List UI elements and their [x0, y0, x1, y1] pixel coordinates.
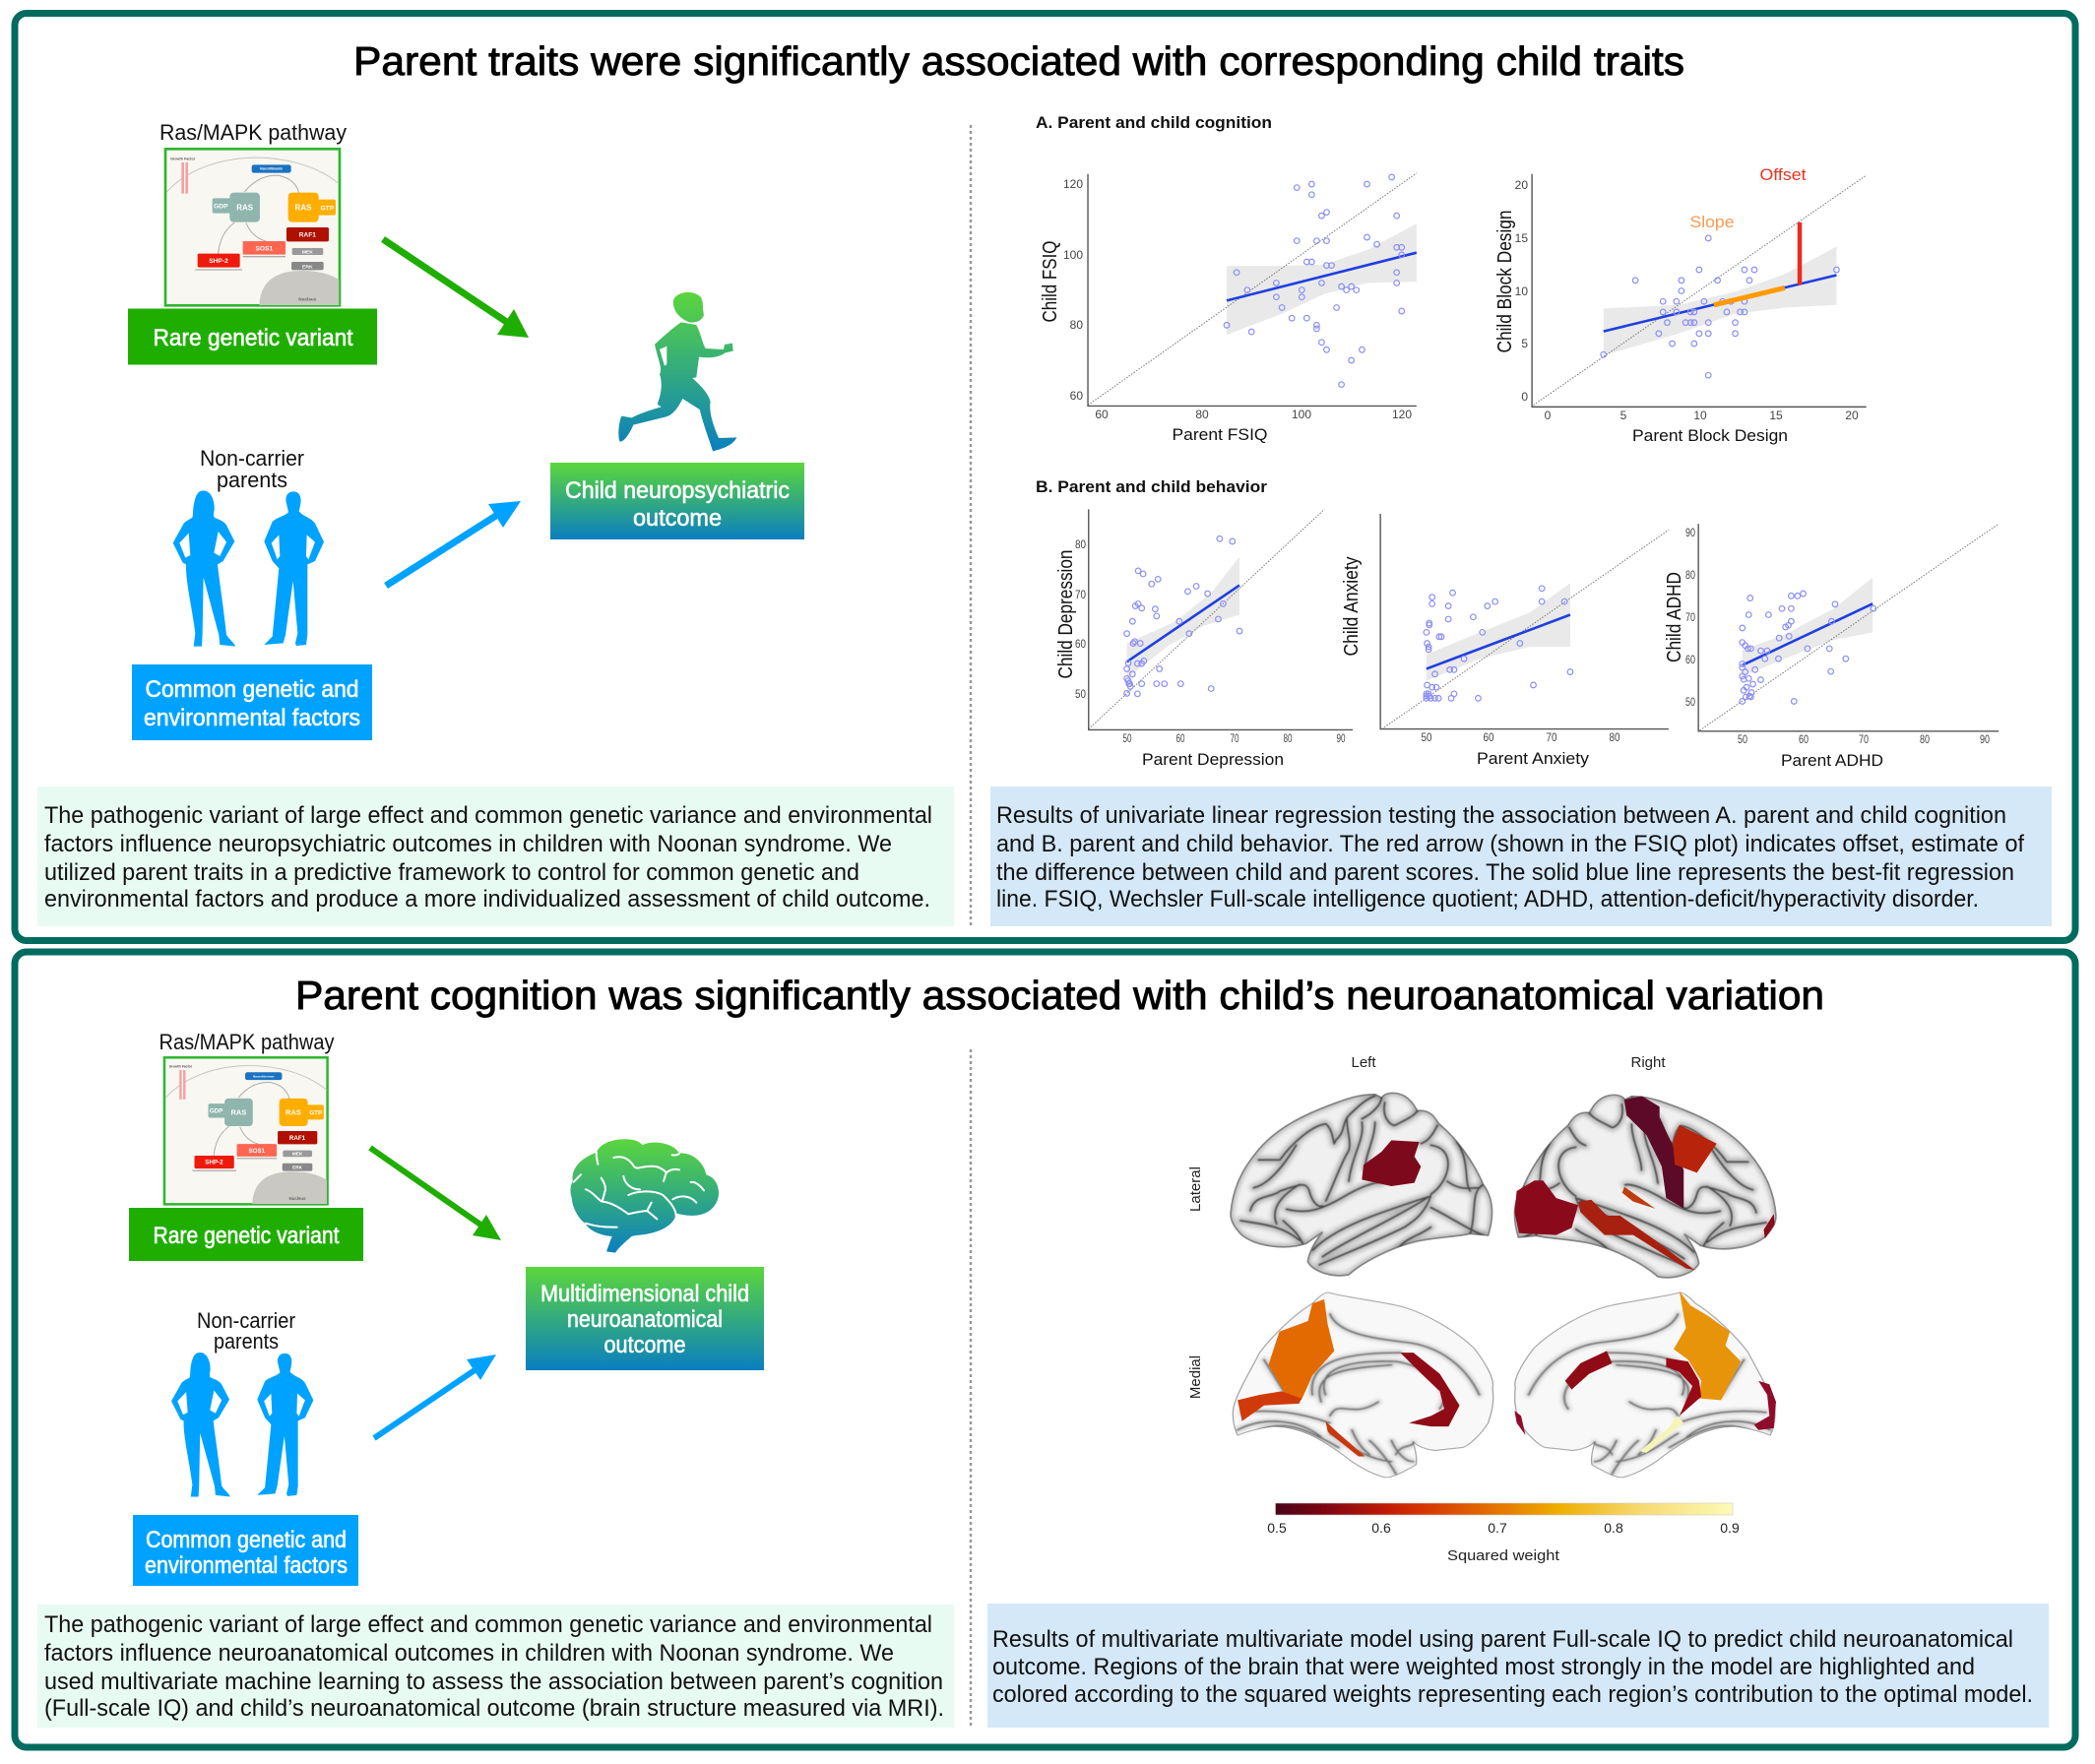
chart: child FSIQ vs parent FSIQ: Parent FSIQ	[1172, 425, 1268, 444]
brain: left medial	[1233, 1292, 1493, 1478]
chart: child vs parent depression: 60	[1175, 731, 1185, 745]
text block: right description	[987, 1604, 2049, 1728]
chart: child vs parent block design: 0	[1521, 390, 1528, 404]
text block: right description: colored according to the squared weights representing each region’s contribution to the optimal model.	[992, 1681, 2033, 1708]
diagram: Ras/MAPK pathway: RAS	[295, 204, 312, 213]
text block: left description	[37, 787, 954, 926]
icon: brain	[571, 1139, 719, 1253]
box: rare genetic variant: Rare genetic variant	[154, 1223, 340, 1249]
chart: child vs parent anxiety: 70	[1546, 730, 1557, 744]
text block: left description: factors influence neuroanatomical outcomes in children with Noonan syndrome. We	[44, 1640, 894, 1667]
diagram: Ras/MAPK pathway	[164, 1057, 328, 1204]
chart: child FSIQ vs parent FSIQ: Child FSIQ	[1040, 240, 1061, 323]
label: Ras/MAPK pathway: Ras/MAPK pathway	[159, 120, 347, 145]
text block: right description: Results of multivariate multivariate model using parent Full-scale IQ to predict child neuroanatomical	[992, 1626, 2013, 1653]
chart: child vs parent ADHD: 50	[1738, 732, 1747, 746]
text block: left description: factors influence neuropsychiatric outcomes in children with Noonan syndrome. We	[44, 831, 892, 857]
panel: parent cognition and neuroanatomical variation	[15, 952, 2075, 1747]
chart: child FSIQ vs parent FSIQ	[1040, 173, 1417, 444]
chart: child vs parent anxiety: Child Anxiety	[1341, 557, 1363, 656]
diagram: Ras/MAPK pathway: GDP	[210, 1108, 222, 1115]
chart: child vs parent ADHD: Child ADHD	[1664, 572, 1685, 662]
chart: child vs parent block design: 20	[1845, 409, 1859, 422]
chart: child vs parent depression: Child Depression	[1055, 549, 1077, 679]
box: rare genetic variant	[129, 1208, 363, 1261]
brain: left lateral	[1231, 1093, 1492, 1276]
icon: running child	[618, 292, 736, 451]
chart: child vs parent block design: 0	[1545, 409, 1552, 422]
text block: right description	[990, 787, 2052, 926]
chart: child vs parent ADHD: 50	[1685, 695, 1695, 709]
title: Parent traits were significantly associated with corresponding child traits	[353, 38, 1684, 84]
legend: squared weight colorbar: 0.7	[1488, 1520, 1507, 1536]
chart: child vs parent anxiety	[1341, 514, 1669, 768]
text block: left description: used multivariate machine learning to assess the association between parent’s cognition	[44, 1669, 943, 1695]
chart: child vs parent block design: 5	[1620, 409, 1627, 422]
label: Lateral: Lateral	[1187, 1166, 1204, 1212]
chart: child vs parent anxiety: 80	[1609, 730, 1620, 744]
label: non-carrier parents: Non-carrier	[197, 1308, 295, 1333]
chart: child vs parent depression: 50	[1122, 731, 1132, 745]
diagram: Ras/MAPK pathway: RAS	[286, 1108, 301, 1117]
diagram: Ras/MAPK pathway: RAF1	[289, 1135, 306, 1142]
label: Left: Left	[1351, 1054, 1376, 1071]
chart: child vs parent ADHD: 80	[1685, 568, 1695, 582]
arrow: blue	[386, 501, 521, 586]
chart: child vs parent anxiety: Parent Anxiety	[1477, 749, 1590, 768]
diagram: Ras/MAPK pathway: SHP-2	[205, 1160, 223, 1166]
diagram: Ras/MAPK pathway: Nucleus	[289, 1196, 306, 1201]
chart: child FSIQ vs parent FSIQ: 120	[1063, 177, 1083, 191]
chart: child vs parent block design: Parent Block Design	[1632, 426, 1788, 445]
diagram: Ras/MAPK pathway: GDP	[214, 203, 228, 210]
chart: child vs parent ADHD: 60	[1685, 653, 1695, 666]
box: rare genetic variant: Rare genetic variant	[154, 325, 353, 351]
diagram: Ras/MAPK pathway: SHP-2	[209, 258, 228, 265]
text block: right description: and B. parent and child behavior. The red arrow (shown in the FSIQ plot) indicates offset, estimate of	[996, 831, 2024, 857]
chart: child FSIQ vs parent FSIQ: 100	[1292, 408, 1311, 421]
heading: B. Parent and child behavior: B. Parent and child behavior	[1036, 477, 1267, 496]
box: multidimensional child neuroanatomical outcome: Multidimensional child	[540, 1281, 749, 1307]
chart: child vs parent depression: 70	[1075, 588, 1086, 601]
diagram: Ras/MAPK pathway: RAS	[236, 204, 254, 213]
text block: left description	[37, 1605, 954, 1728]
brain: right medial	[1514, 1292, 1776, 1478]
text block: left description: utilized parent traits in a predictive framework to control for common genetic and	[44, 859, 859, 886]
diagram: Ras/MAPK pathway: Nucleus	[298, 297, 317, 302]
chart: child FSIQ vs parent FSIQ: 120	[1392, 408, 1412, 421]
legend: squared weight colorbar: 0.6	[1371, 1520, 1391, 1536]
label: Right: Right	[1630, 1054, 1666, 1071]
chart: child vs parent ADHD	[1664, 524, 1999, 770]
chart: child vs parent block design: 20	[1515, 178, 1528, 192]
label: Medial: Medial	[1187, 1355, 1204, 1399]
chart: child vs parent anxiety: 60	[1483, 730, 1494, 744]
panel: parent traits and child traits	[15, 14, 2075, 941]
chart: child FSIQ vs parent FSIQ: 80	[1070, 318, 1083, 332]
diagram: Ras/MAPK pathway: Growth Factor	[170, 157, 196, 160]
arrow: blue	[374, 1354, 496, 1438]
chart: child vs parent block design: 5	[1521, 337, 1528, 350]
diagram: Ras/MAPK pathway: MEK	[302, 249, 313, 255]
chart: child vs parent depression: 80	[1075, 537, 1086, 551]
icon: mother silhouette	[171, 1353, 230, 1496]
diagram: Ras/MAPK pathway: RAS	[231, 1108, 246, 1117]
chart: child vs parent ADHD: Parent ADHD	[1781, 751, 1883, 770]
chart: child FSIQ vs parent FSIQ: 80	[1195, 408, 1209, 421]
chart: child vs parent depression: Parent Depression	[1142, 750, 1284, 769]
heading: A. Parent and child cognition: A. Parent and child cognition	[1036, 113, 1272, 132]
panel border	[15, 14, 2075, 941]
chart: child vs parent block design: 10	[1693, 409, 1707, 422]
box: rare genetic variant	[128, 309, 377, 364]
chart: child vs parent depression: 50	[1075, 687, 1086, 701]
chart: child vs parent block design: Offset	[1760, 165, 1807, 184]
diagram: Ras/MAPK pathway: ERK	[292, 1166, 303, 1170]
legend: squared weight colorbar: Squared weight	[1447, 1547, 1560, 1564]
diagram: Ras/MAPK pathway: Growth Factor	[169, 1065, 193, 1069]
brain: right lateral	[1514, 1095, 1776, 1278]
legend: squared weight colorbar: 0.9	[1720, 1520, 1740, 1536]
text block: right description: outcome. Regions of the brain that were weighted most strongly in the model are highlighted and	[992, 1654, 1975, 1680]
legend: squared weight colorbar: 0.5	[1267, 1520, 1287, 1536]
diagram: Ras/MAPK pathway: GTP	[320, 206, 335, 213]
chart: child vs parent depression: 70	[1231, 731, 1239, 745]
chart: child vs parent depression: 60	[1075, 637, 1086, 651]
chart: child vs parent depression	[1055, 509, 1353, 769]
chart: child vs parent ADHD: 70	[1685, 610, 1695, 624]
label: non-carrier parents	[200, 446, 304, 492]
icon: father silhouette	[264, 491, 324, 646]
text block: right description: line. FSIQ, Wechsler Full-scale intelligence quotient; ADHD, attention-deficit/hyperactivity disorder.	[996, 886, 1979, 913]
panel border	[15, 952, 2075, 1747]
chart: child vs parent block design: 10	[1515, 284, 1528, 298]
legend: squared weight colorbar: 0.8	[1604, 1520, 1623, 1536]
box: common genetic and environmental factors: Common genetic and	[146, 1527, 347, 1553]
text block: left description: (Full-scale IQ) and child’s neuroanatomical outcome (brain structure measured via MRI).	[44, 1695, 944, 1722]
text block: right description: Results of univariate linear regression testing the association between A. parent and child cognition	[996, 802, 2006, 829]
legend: squared weight colorbar	[1267, 1503, 1740, 1564]
chart: child FSIQ vs parent FSIQ: 100	[1063, 248, 1083, 262]
icon: father silhouette	[257, 1354, 313, 1496]
diagram: Ras/MAPK pathway: RAF1	[299, 232, 316, 239]
chart: child FSIQ vs parent FSIQ: 60	[1070, 389, 1083, 403]
chart: child vs parent depression: 90	[1337, 731, 1346, 745]
box: multidimensional child neuroanatomical outcome	[526, 1267, 764, 1370]
chart: child vs parent depression: 80	[1284, 731, 1293, 745]
arrow: green	[383, 239, 529, 338]
chart: child vs parent ADHD: 90	[1685, 526, 1695, 539]
text block: right description: the difference between child and parent scores. The solid blue line represents the best-fit regression	[996, 859, 2014, 886]
box: multidimensional child neuroanatomical outcome: outcome	[604, 1332, 685, 1358]
box: common genetic and environmental factors: Common genetic and	[146, 676, 358, 703]
diagram: Ras/MAPK pathway: SOS1	[255, 245, 273, 252]
box: multidimensional child neuroanatomical outcome: neuroanatomical	[567, 1306, 723, 1333]
title: Parent cognition was significantly associated with child’s neuroanatomical variation	[295, 973, 1824, 1018]
chart: child FSIQ vs parent FSIQ: 60	[1095, 408, 1109, 421]
diagram: Ras/MAPK pathway	[165, 149, 340, 305]
label: non-carrier parents: parents	[214, 1329, 279, 1354]
chart: child vs parent ADHD: 90	[1980, 732, 1990, 746]
chart: child vs parent ADHD: 70	[1859, 732, 1869, 746]
text block: left description: The pathogenic variant of large effect and common genetic variance and environmental	[44, 802, 932, 829]
chart: child vs parent anxiety: 50	[1422, 730, 1432, 744]
chart: child vs parent block design: Slope	[1689, 213, 1735, 231]
icon: mother silhouette	[173, 490, 235, 647]
chart: child vs parent ADHD: 60	[1799, 732, 1809, 746]
box: common genetic and environmental factors	[133, 1515, 358, 1586]
chart: child vs parent block design	[1494, 165, 1867, 445]
box: common genetic and environmental factors	[132, 664, 372, 740]
chart: child vs parent block design: Child Block Design	[1494, 211, 1516, 352]
diagram: Ras/MAPK pathway: SOS1	[249, 1148, 266, 1155]
box: child neuropsychiatric outcome: outcome	[633, 505, 722, 532]
diagram: Ras/MAPK pathway: MEK	[292, 1152, 303, 1157]
text block: left description: environmental factors and produce a more individualized assessment of child outcome.	[44, 886, 930, 913]
label: non-carrier parents: Non-carrier	[200, 446, 304, 471]
diagram: Ras/MAPK pathway: Neurofibromin	[253, 1074, 275, 1078]
box: common genetic and environmental factors: environmental factors	[145, 1552, 348, 1579]
box: common genetic and environmental factors: environmental factors	[144, 705, 360, 731]
box: child neuropsychiatric outcome	[550, 463, 804, 539]
label: non-carrier parents: parents	[217, 468, 287, 492]
text block: left description: The pathogenic variant of large effect and common genetic variance and environmental	[44, 1611, 932, 1638]
chart: child vs parent block design: 15	[1515, 231, 1528, 245]
diagram: Ras/MAPK pathway: ERK	[302, 264, 313, 270]
label: Ras/MAPK pathway: Ras/MAPK pathway	[159, 1030, 335, 1054]
chart: child vs parent block design: 15	[1769, 409, 1783, 422]
diagram: Ras/MAPK pathway: GTP	[309, 1110, 322, 1117]
label: non-carrier parents	[197, 1308, 295, 1354]
arrow: green	[370, 1148, 501, 1240]
chart: child vs parent ADHD: 80	[1920, 732, 1930, 746]
diagram: Ras/MAPK pathway: Neurofibromin	[260, 167, 283, 171]
box: child neuropsychiatric outcome: Child neuropsychiatric	[565, 477, 790, 504]
